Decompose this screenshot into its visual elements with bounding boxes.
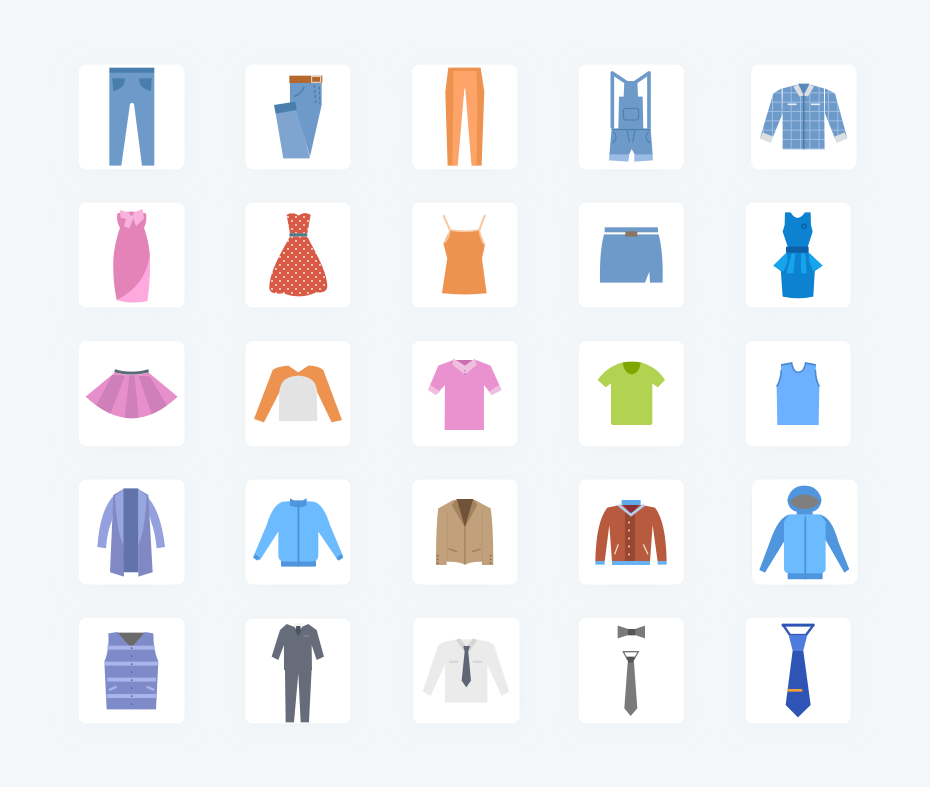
panel: long coat xyxy=(78,479,185,585)
panel: blue tank top xyxy=(745,341,851,447)
panel: grey suit xyxy=(245,618,351,724)
panel: overalls xyxy=(578,64,684,170)
icon: blue zip jacket xyxy=(253,498,343,567)
icon: tan blazer xyxy=(436,499,493,565)
panel: bow tie and necktie xyxy=(578,617,684,724)
panel: pink polo xyxy=(412,341,518,447)
icon: bow tie and grey necktie xyxy=(618,626,645,716)
icon: grey suit xyxy=(272,623,324,722)
infographic: clothing icon grid xyxy=(79,64,858,724)
icon: pink polo shirt xyxy=(428,358,502,430)
icon: blue peplum dress xyxy=(773,212,823,298)
panel: plaid shirt xyxy=(751,64,857,170)
icon: long purple coat xyxy=(97,488,165,577)
icon: jeans xyxy=(109,68,154,166)
panel: orange trousers xyxy=(412,64,518,170)
panel: orange camisole xyxy=(412,202,518,308)
icon: blue tank top xyxy=(777,362,819,425)
icon: orange camisole xyxy=(442,215,487,294)
panel: raglan shirt xyxy=(245,341,351,447)
icon: raglan shirt xyxy=(254,366,342,422)
panel: varsity jacket xyxy=(578,479,684,585)
icon: pink strapless dress xyxy=(113,209,150,302)
panel: jeans xyxy=(78,64,185,170)
panel: denim skirt xyxy=(578,202,684,308)
icon: polka dot dress xyxy=(269,213,327,296)
panel: cuffed jeans xyxy=(245,64,351,170)
panel: blue necktie xyxy=(745,617,851,724)
icon: green t-shirt xyxy=(598,362,665,425)
panel: puffer vest xyxy=(78,617,185,724)
panel: zip jacket xyxy=(245,479,351,585)
icon: cuffed jeans with belt xyxy=(274,76,322,158)
panel: hoodie xyxy=(752,479,858,585)
icon: blue hoodie xyxy=(759,486,849,579)
icon: plaid shirt xyxy=(760,84,847,149)
panel: blue peplum dress xyxy=(745,202,851,308)
icon: purple puffer vest xyxy=(104,632,158,709)
panel: pink tutu skirt xyxy=(78,341,185,447)
icon: blue necktie xyxy=(782,624,815,717)
panel: white shirt and tie xyxy=(413,617,520,724)
panel: polka dot dress xyxy=(245,202,351,308)
icon: orange trousers xyxy=(445,68,484,166)
panel: blazer xyxy=(412,479,518,585)
panel: pink dress xyxy=(78,202,185,308)
icon: red varsity jacket xyxy=(595,500,667,565)
panel: green t-shirt xyxy=(578,341,684,447)
icon: denim overalls xyxy=(609,73,653,162)
icon: denim skirt xyxy=(600,227,663,283)
icon: white shirt with tie xyxy=(423,638,509,703)
icon: pink tutu skirt xyxy=(86,371,178,422)
